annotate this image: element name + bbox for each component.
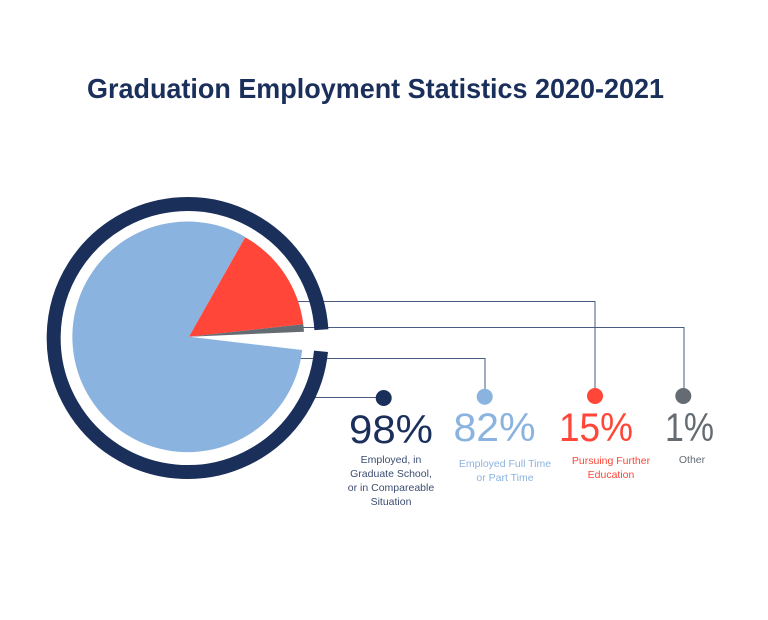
value: 1%: 1% xyxy=(665,406,714,450)
label: 98%: or in Compareable xyxy=(348,482,434,494)
stat: 1% xyxy=(665,388,714,466)
donut ring: 98% xyxy=(54,204,321,472)
pie slice: 82% employed xyxy=(72,222,302,452)
label: 15%: Pursuing Further xyxy=(572,455,651,467)
label: 82%: or Part Time xyxy=(476,472,534,484)
pie slice: 1% other xyxy=(189,324,304,337)
stat: 98% xyxy=(348,390,434,508)
marker dot: blue xyxy=(477,389,493,405)
value: 82%: 82% xyxy=(454,406,536,450)
stat: 15% xyxy=(559,388,651,481)
line: 98% connector xyxy=(314,396,384,398)
pie chart xyxy=(72,222,304,452)
value: 98%: 98% xyxy=(349,408,433,452)
label: 98%: Graduate School, xyxy=(350,468,432,480)
line: 15% connector xyxy=(298,302,595,390)
label: 82%: Employed Full Time xyxy=(459,458,551,470)
marker dot: gray xyxy=(675,388,691,404)
line: 1% connector xyxy=(302,328,684,390)
marker dot: navy xyxy=(376,390,392,406)
stat: 82% xyxy=(454,389,551,484)
line: 82% connector xyxy=(300,358,485,390)
label: 98%: Employed, in xyxy=(361,454,422,466)
label: 98%: Situation xyxy=(371,496,412,508)
label: 1%: Other xyxy=(679,454,706,466)
pie slice: 15% further education xyxy=(189,237,303,337)
connector lines xyxy=(298,302,684,398)
marker dot: red xyxy=(587,388,603,404)
label: 15%: Education xyxy=(588,469,635,481)
value: 15%: 15% xyxy=(559,406,633,450)
title: Graduation Employment Statistics 2020-2021 xyxy=(87,73,664,104)
